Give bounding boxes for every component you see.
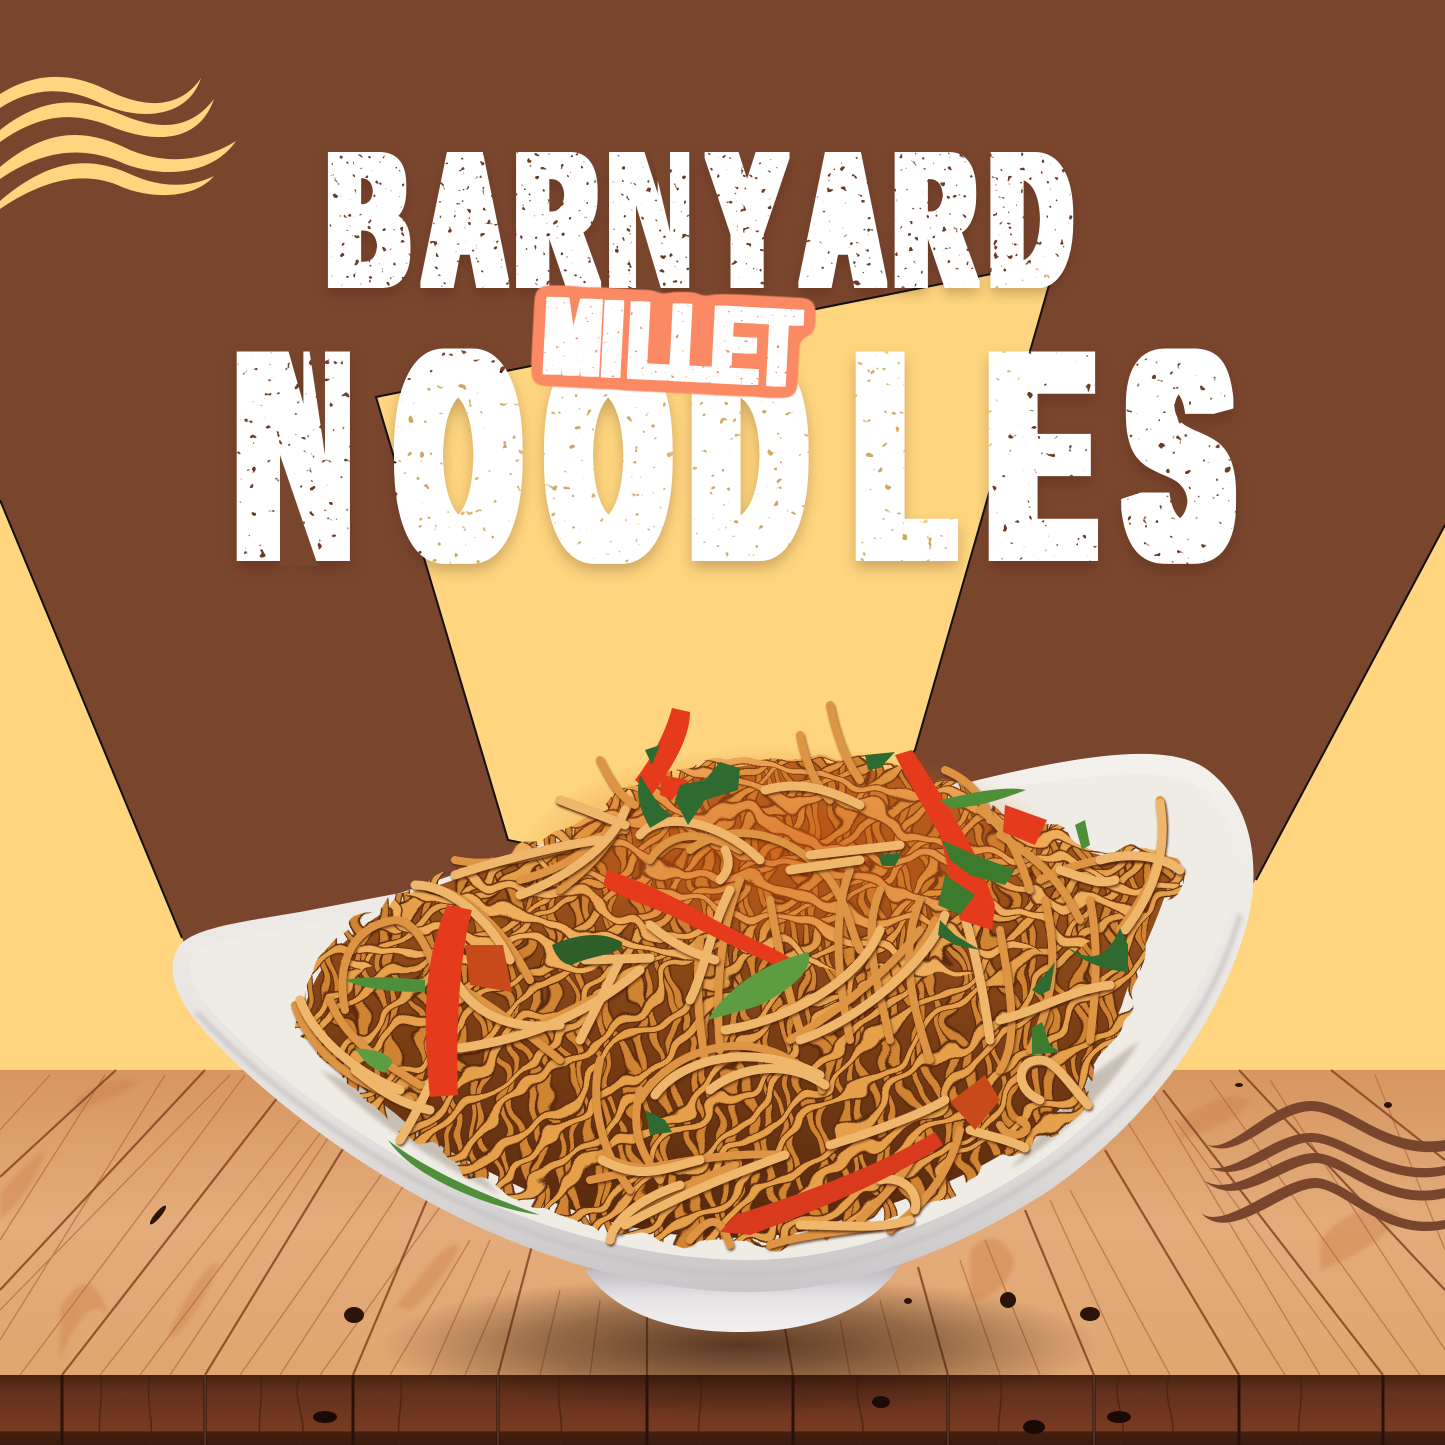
bowl: outer body	[173, 754, 1254, 1292]
background: left yellow ray	[0, 500, 300, 1075]
vegetables: red pepper strips	[426, 708, 1047, 1235]
noodle bowl illustration	[173, 705, 1254, 1332]
decorative squiggle: top-left	[0, 77, 236, 209]
background: right ray edge	[1256, 525, 1445, 880]
background: centre yellow ray	[376, 261, 1056, 900]
background: left ray edge	[0, 500, 182, 938]
title detail: N notches in BARNYARD	[636, 148, 670, 292]
title: NOODLES: NOODLES	[241, 293, 1228, 618]
noodle sauce glaze	[520, 745, 1060, 955]
bowl: foot	[585, 1265, 900, 1332]
background: right yellow ray	[1160, 525, 1445, 1075]
bowl: rim shadow	[196, 915, 1240, 1274]
noodle strands: middle layer	[295, 705, 1175, 1245]
noodle texture: woven strand layers	[296, 748, 1183, 1247]
wooden table front edge	[0, 1375, 1445, 1445]
title: BARNYARD: BARNYARD	[330, 115, 1069, 326]
vegetables: green herbs	[345, 745, 1128, 1215]
title tag: MILLET: MILLET	[542, 275, 801, 408]
vegetables: dark pepper chunks	[465, 945, 1000, 1130]
bowl: inner surface	[190, 774, 1237, 1260]
noodle mound base	[304, 762, 1170, 1238]
decorative squiggle: bottom-right	[1201, 1101, 1445, 1231]
bowl shadow on table	[380, 1275, 1100, 1415]
wooden table top	[0, 1070, 1445, 1376]
noodle strands: light top layer	[300, 786, 1180, 1240]
bowl: inner shadow	[320, 1040, 1140, 1195]
title detail: N notches in NOODLES	[280, 348, 325, 566]
